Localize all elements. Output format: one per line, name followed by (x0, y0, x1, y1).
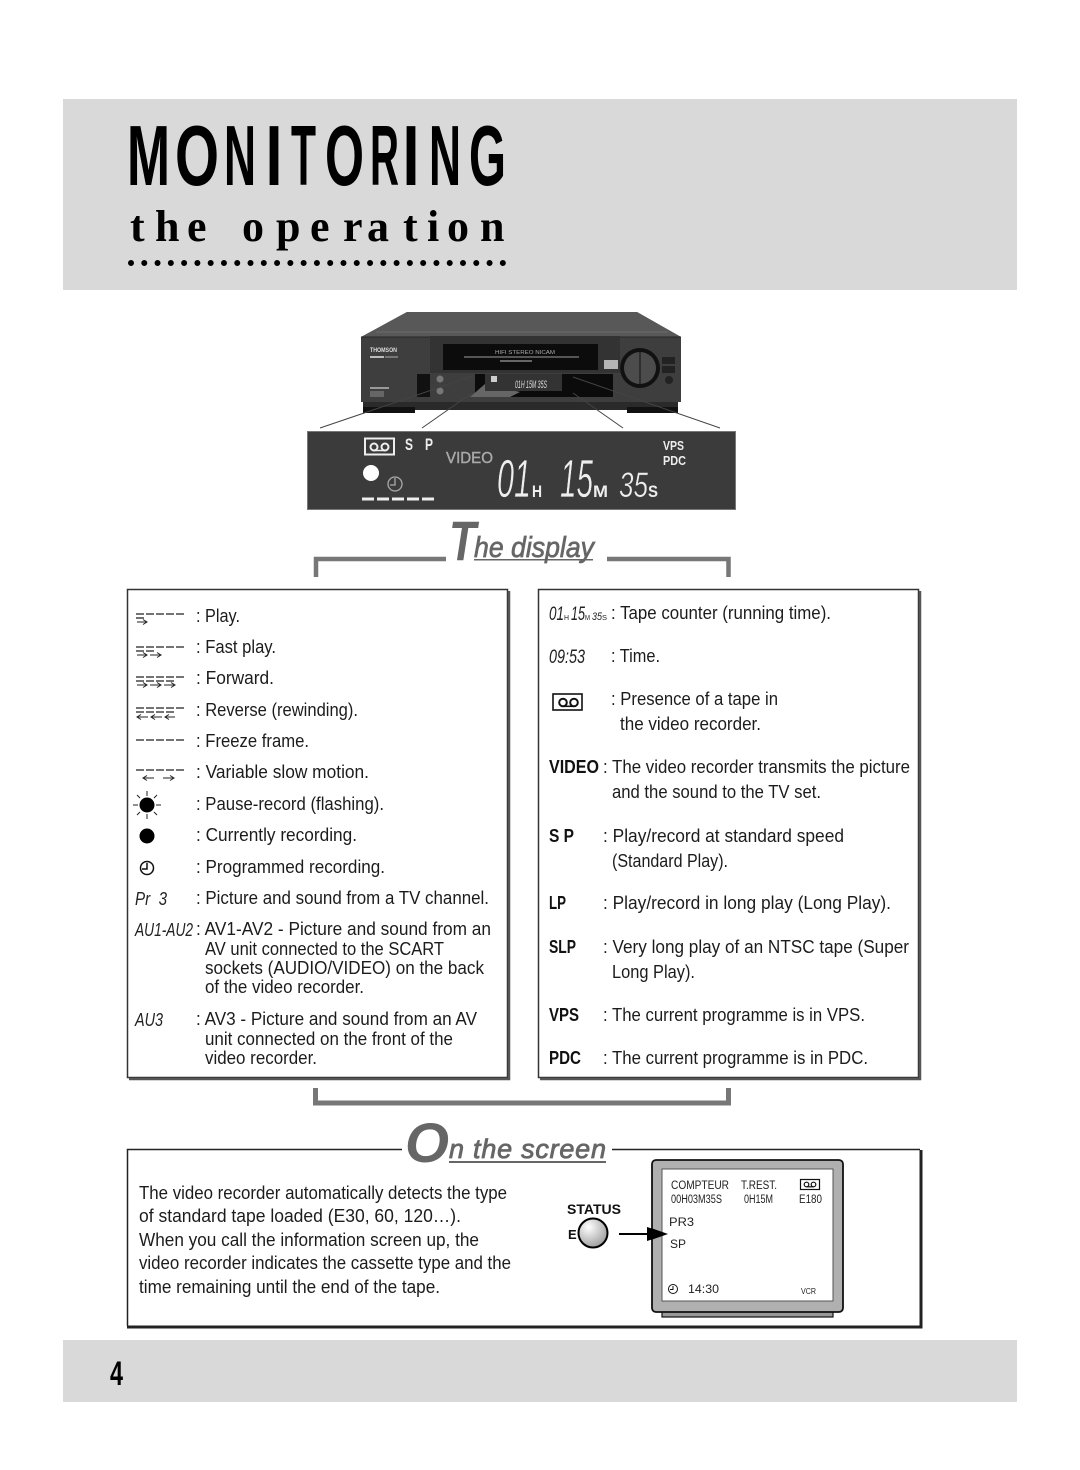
title: MONITORING: I (402, 109, 420, 204)
transport bar (362, 498, 435, 500)
symbol: counter: 01 (549, 604, 564, 625)
body text (139, 1183, 511, 1297)
legend text: : Picture and sound from a TV channel. (196, 888, 489, 908)
bold keys: SLP (549, 937, 576, 957)
symbol: fast play (136, 647, 184, 658)
speed indicator: S (405, 435, 413, 454)
icon: cassette (800, 1180, 820, 1190)
legend text: : Pause-record (flashing). (196, 794, 384, 814)
legend text: : Fast play. (196, 637, 276, 657)
descriptions: : Tape counter (running time). (611, 603, 831, 623)
icon: cassette (365, 438, 394, 454)
symbol: variable slow (136, 770, 184, 780)
legend text: : Play. (196, 606, 240, 626)
symbol: counter: 15 (571, 604, 585, 625)
bold keys: VIDEO (549, 757, 599, 777)
on-screen information: 0H15M (744, 1194, 773, 1206)
VCR illustration: 01H 15M 35S (515, 379, 547, 391)
page number: 4 (110, 1355, 123, 1393)
symbol: play (136, 614, 184, 624)
descriptions: Long Play). (612, 962, 695, 982)
body text: When you call the information screen up, the (139, 1230, 479, 1250)
heading: The display: he display (474, 532, 595, 564)
descriptions: : Play/record at standard speed (603, 826, 844, 846)
speed indicator: P (425, 435, 433, 454)
symbol: counter: 35 (592, 611, 603, 623)
descriptions: (Standard Play). (612, 851, 728, 871)
counter readout: 35 (619, 466, 648, 505)
symbol: counter: M (585, 615, 590, 622)
subtitle: the operation: the operation (130, 202, 504, 251)
counter readout: H (532, 482, 542, 501)
heading: On the screen (405, 1111, 606, 1174)
icon: record (140, 828, 154, 844)
status button: STATUS (567, 1201, 621, 1217)
descriptions: : Very long play of an NTSC tape (Super (603, 937, 909, 957)
speed indicator (405, 435, 433, 454)
status button (567, 1201, 621, 1248)
descriptions: and the sound to the TV set. (612, 782, 821, 802)
title: MONITORING: M (127, 109, 170, 204)
VCR feet (363, 402, 678, 410)
legend text (196, 606, 491, 1068)
VCR illustration (361, 312, 681, 413)
bold keys: S P (549, 826, 574, 846)
descriptions: : The current programme is in VPS. (603, 1005, 865, 1025)
legend text: of the video recorder. (205, 977, 364, 997)
body text: The video recorder automatically detects the type (139, 1183, 507, 1203)
bold keys: PDC (549, 1048, 581, 1068)
title: MONITORING: O (325, 109, 364, 204)
body text: video recorder indicates the cassette type and the (139, 1253, 511, 1273)
bold keys: LP (549, 893, 566, 913)
legend text: unit connected on the front of the (205, 1029, 453, 1049)
legend labels: AU1-AU2 (134, 920, 193, 940)
symbol: counter: H (564, 615, 569, 622)
legend text: video recorder. (205, 1048, 317, 1068)
jog dial (620, 348, 660, 388)
descriptions: : Play/record in long play (Long Play). (603, 893, 891, 913)
counter readout: 15 (560, 449, 594, 509)
legend text: : Freeze frame. (196, 731, 309, 751)
body text: time remaining until the end of the tape. (139, 1277, 440, 1297)
eject button (604, 360, 618, 369)
cassette bay (430, 336, 620, 373)
panel: display symbols, left (128, 590, 509, 1079)
symbol: counter (549, 604, 607, 625)
status button: E (568, 1227, 577, 1242)
legend labels: Pr 3 (135, 889, 167, 909)
on-screen information: COMPTEUR (671, 1180, 729, 1192)
descriptions (603, 603, 910, 1068)
descriptions: the video recorder. (620, 714, 761, 734)
counter readout: S (648, 482, 658, 501)
on-screen information: E180 (799, 1194, 822, 1206)
legend text: : Currently recording. (196, 825, 357, 845)
counter readout: M (593, 482, 608, 501)
on-screen information: PR3 (669, 1217, 694, 1229)
icon: pause-record sun (133, 791, 161, 819)
title: MONITORING: I (266, 109, 282, 204)
lower bracket (316, 1088, 728, 1103)
legend text: : Variable slow motion. (196, 762, 369, 782)
title: MONITORING: N (224, 109, 256, 204)
title: MONITORING: R (370, 109, 399, 204)
symbol: time: 09:53 (549, 647, 585, 668)
symbol: forward (136, 677, 184, 688)
on-screen information: VCR (801, 1287, 816, 1296)
front strip (475, 374, 613, 397)
title: MONITORING: T (291, 109, 316, 204)
counter readout: 01 (497, 449, 531, 509)
on-screen information: 14:30 (688, 1284, 719, 1296)
VIDEO indicator: VIDEO (446, 450, 493, 467)
icon: clock (668, 1284, 678, 1294)
display panel (308, 432, 736, 510)
on-screen information (669, 1180, 822, 1296)
body text: of standard tape loaded (E30, 60, 120…). (139, 1206, 461, 1226)
title: MONITORING: N (429, 109, 461, 204)
VPS PDC indicators: PDC (663, 453, 687, 468)
bold keys: VPS (549, 1005, 579, 1025)
descriptions: : The video recorder transmits the picture (603, 757, 910, 777)
symbol: counter: S (602, 615, 607, 622)
on-screen information: T.REST. (741, 1180, 777, 1192)
icon: clock (388, 477, 402, 491)
icon: cassette (553, 694, 582, 710)
panel: on the screen (127, 1111, 921, 1327)
VPS PDC indicators: VPS (663, 438, 684, 453)
title: MONITORING: G (469, 109, 506, 204)
heading: The display: T (449, 509, 480, 572)
descriptions: : The current programme is in PDC. (603, 1048, 868, 1068)
icon: clock (140, 862, 154, 874)
VPS PDC indicators (663, 438, 687, 468)
legend text: : Forward. (196, 668, 274, 688)
TV screen (651, 1160, 843, 1317)
zoom lines (320, 376, 720, 428)
legend text: : AV1-AV2 - Picture and sound from an (196, 919, 491, 939)
title: MONITORING (127, 109, 506, 204)
legend text: AV unit connected to the SCART (205, 939, 444, 959)
legend text: sockets (AUDIO/VIDEO) on the back (205, 958, 485, 978)
icon: record dot (363, 465, 379, 481)
panel: display symbols, right (538, 590, 920, 1079)
counter readout (497, 449, 658, 509)
legend text: : Programmed recording. (196, 857, 385, 877)
dotted rule (131, 260, 504, 266)
on-screen information: SP (670, 1239, 686, 1251)
maker label: THOMSON (370, 348, 397, 354)
legend labels: AU3 (134, 1010, 163, 1030)
heading: The display (316, 509, 728, 577)
bold keys (549, 757, 599, 1068)
arrow (619, 1227, 669, 1241)
legend text: : AV3 - Picture and sound from an AV (196, 1009, 477, 1029)
descriptions: : Presence of a tape in (611, 689, 778, 709)
legend labels (134, 889, 193, 1030)
heading: On the screen: n the screen (449, 1134, 606, 1164)
legend text: : Reverse (rewinding). (196, 700, 358, 720)
footer band (63, 1340, 1017, 1402)
descriptions: : Time. (611, 646, 660, 666)
symbol: reverse (136, 708, 184, 720)
title: MONITORING: O (175, 109, 219, 204)
on-screen information: 00H03M35S (671, 1194, 722, 1206)
symbol: freeze (136, 739, 184, 741)
header band (63, 99, 1017, 290)
VCR illustration: HIFI STEREO NICAM (495, 350, 555, 356)
heading: On the screen: O (405, 1111, 449, 1174)
